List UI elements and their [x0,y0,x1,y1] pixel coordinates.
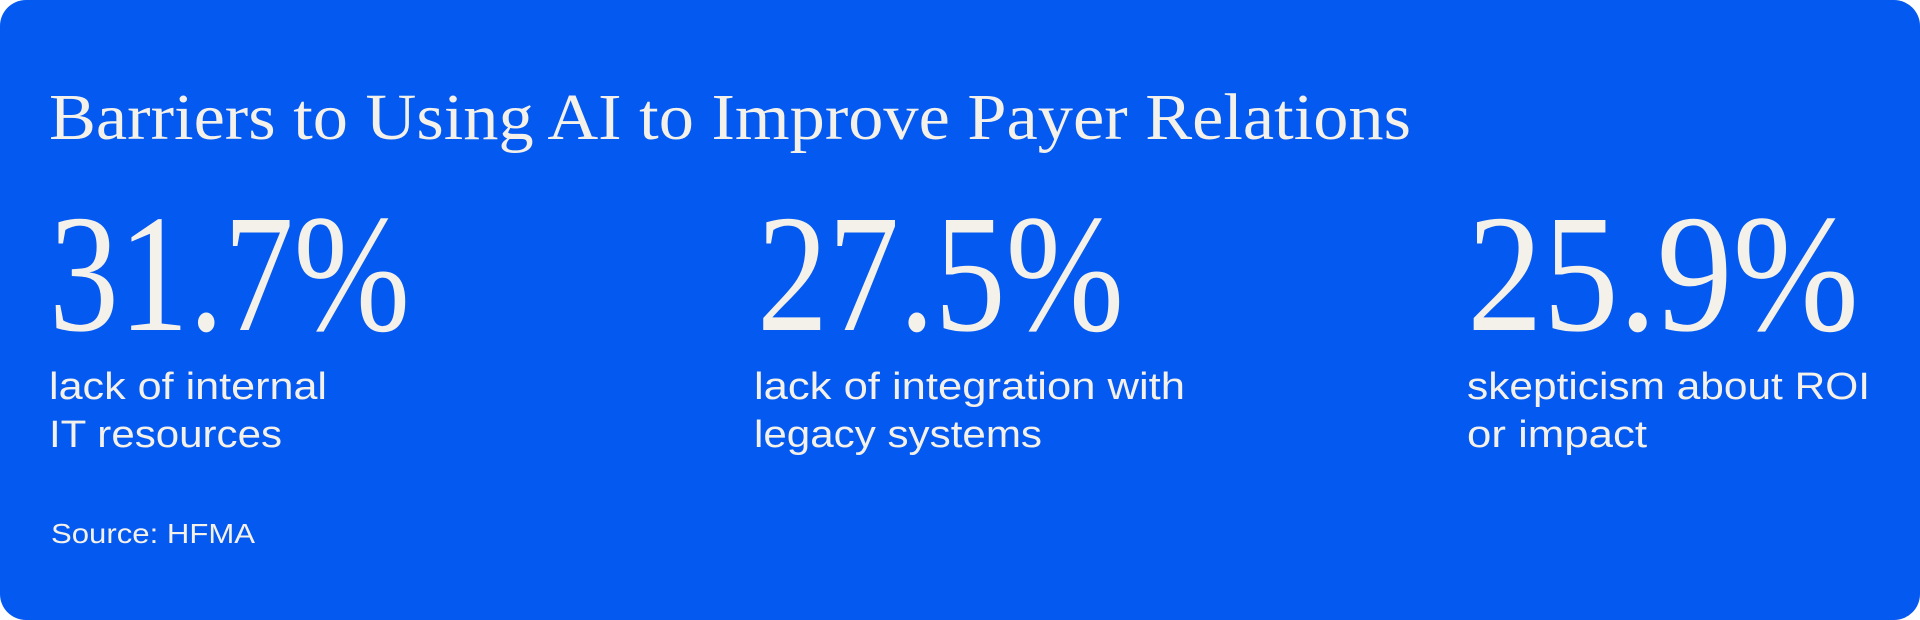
stat: 27.5% [754,181,1185,456]
label: lack of internal IT resources: lack of internal [49,366,327,408]
stat: 31.7% [49,181,410,456]
stat: 31.7%: 31.7% [49,181,410,367]
stat: 27.5%: 27.5% [757,181,1124,367]
source note: Source: HFMA [51,518,255,549]
title: Barriers to Using AI to Improve Payer Relations [49,81,1411,154]
label: lack of integration with legacy systems: lack of integration with [754,366,1185,408]
label: lack of integration with legacy systems: legacy systems [754,414,1042,456]
stat: 25.9% [1467,181,1870,456]
label: skepticism about ROI or impact: skepticism about ROI [1467,366,1870,408]
label: lack of internal IT resources: IT resources [49,414,282,456]
label: skepticism about ROI or impact: or impact [1467,414,1647,456]
stat: 25.9%: 25.9% [1467,181,1859,367]
